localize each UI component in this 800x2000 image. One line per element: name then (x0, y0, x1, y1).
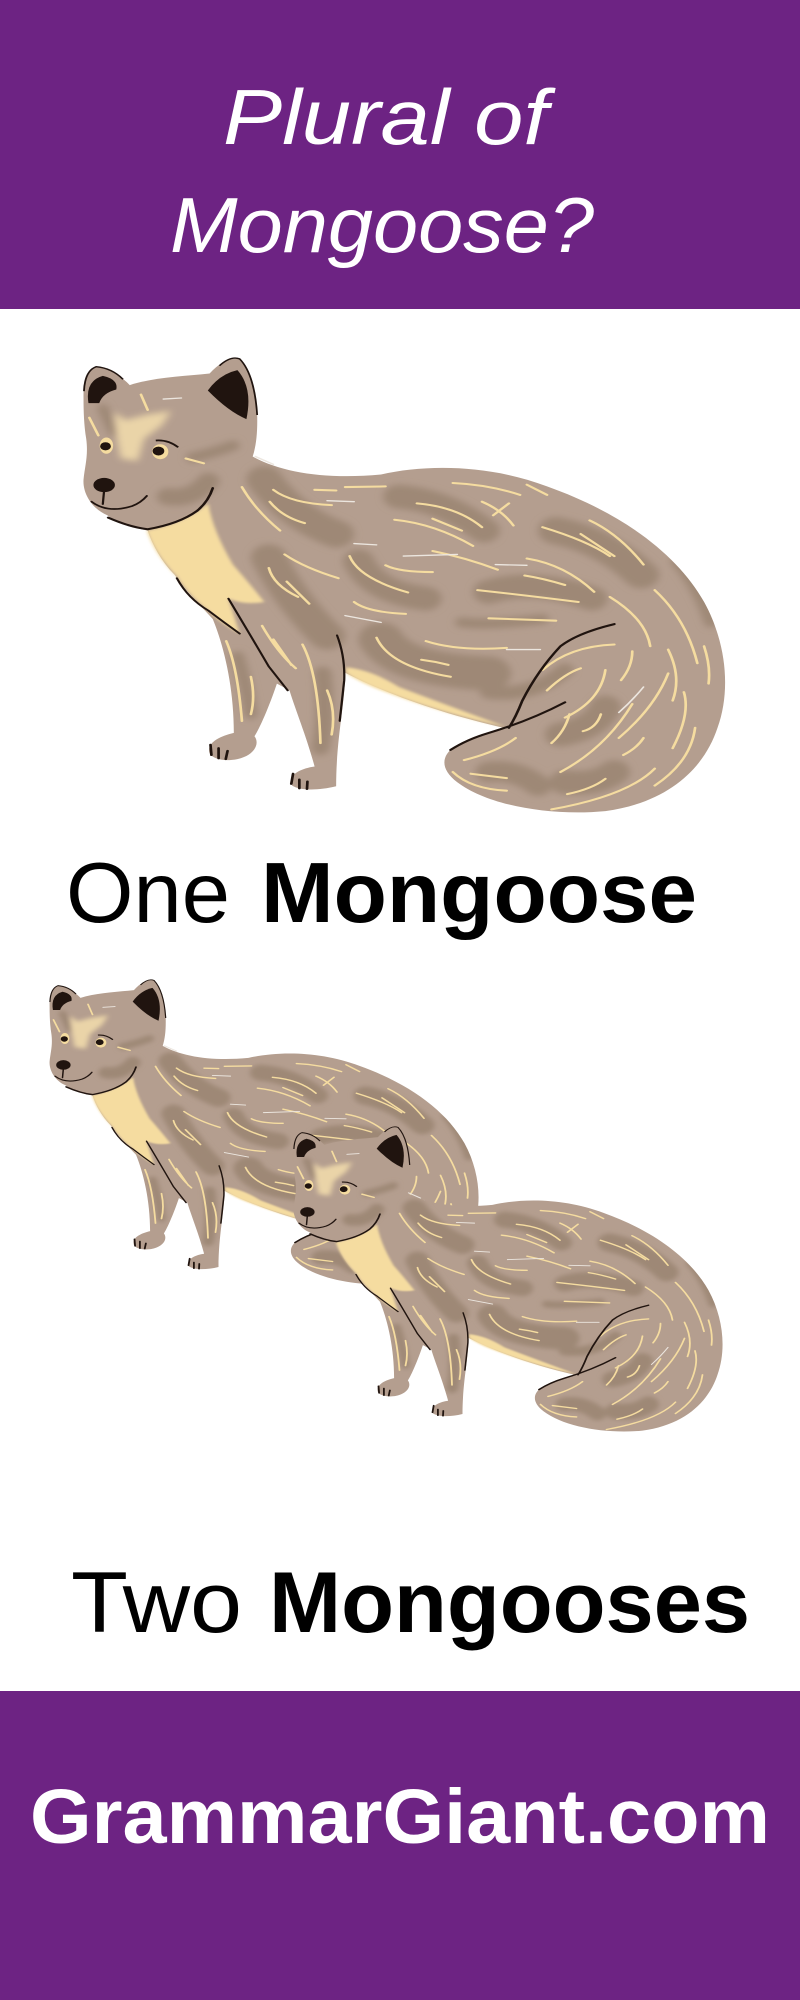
title: Mongoose? (170, 181, 595, 269)
caption: one mongoose: One (66, 846, 230, 941)
footer band (0, 1691, 800, 2000)
rear mongoose (50, 980, 479, 1284)
white brush highlights (163, 398, 644, 712)
eyes (100, 437, 178, 459)
ink lines (92, 488, 614, 789)
mongoose body silhouette (83, 359, 725, 812)
caption: two mongooses: Mongooses (269, 1555, 750, 1651)
ears (84, 358, 257, 419)
caption: one mongoose: Mongoose (261, 846, 697, 941)
caption: two mongooses: Two (71, 1555, 242, 1651)
illustration: two mongooses (50, 980, 723, 1431)
footer website: GrammarGiant.com (30, 1774, 770, 1860)
title: Plural of (223, 73, 556, 161)
brush shading (103, 408, 711, 786)
header band (0, 0, 800, 309)
front mongoose (294, 1127, 723, 1431)
chest and belly fur (114, 411, 507, 727)
fur streaks (89, 395, 709, 809)
caption: one mongoose (66, 846, 697, 941)
title (170, 73, 595, 269)
nose (93, 478, 115, 492)
illustration: one mongoose (83, 358, 725, 812)
